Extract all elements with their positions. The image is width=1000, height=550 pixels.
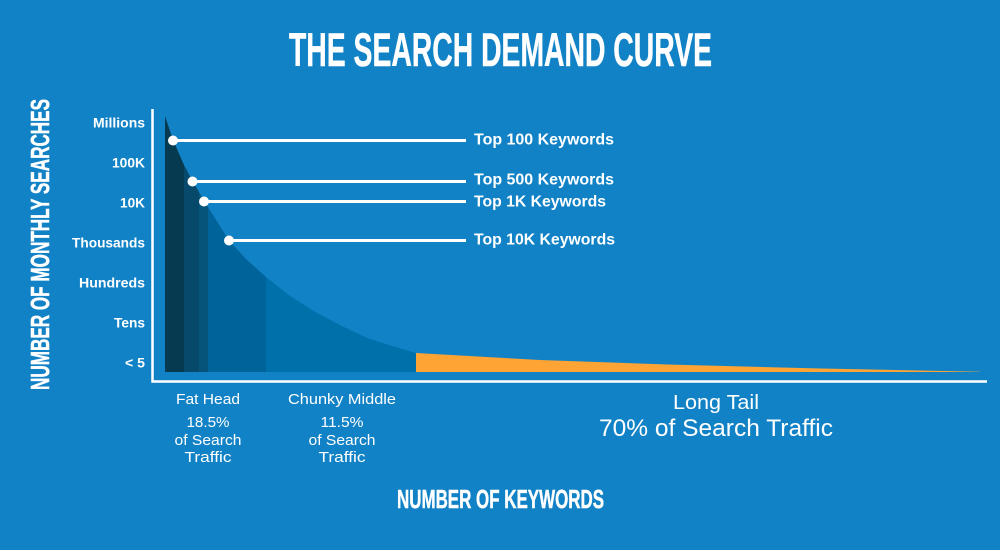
callout: top 100 keywords: Top 100 Keywords — [474, 132, 614, 148]
segment: top 100 keywords — [165, 116, 184, 372]
chart axes — [152, 109, 987, 382]
callout: top 10K keywords: Top 10K Keywords — [474, 232, 615, 248]
label: fat head: of Search — [174, 432, 242, 449]
label: chunky middle: of Search — [308, 432, 376, 449]
label: fat head: 18.5% — [186, 414, 230, 431]
label: long tail: Long Tail — [673, 392, 759, 414]
y axis labels: < 5 — [125, 356, 145, 370]
segment: top 500 keywords — [184, 165, 199, 372]
y axis labels: Hundreds — [79, 276, 145, 290]
segment: chunky middle — [266, 277, 416, 372]
y axis labels: Millions — [93, 116, 145, 130]
label: fat head: Traffic — [184, 449, 232, 466]
y axis labels: 10K — [120, 196, 145, 210]
label: chunky middle: Traffic — [318, 449, 366, 466]
segment: top 10K keywords — [208, 207, 266, 372]
label: fat head — [174, 391, 242, 466]
callout: top 10K keywords — [224, 232, 615, 248]
title: THE SEARCH DEMAND CURVE — [289, 23, 712, 76]
label: long tail: 70% of Search Traffic — [599, 415, 833, 442]
label: chunky middle: Chunky Middle — [288, 391, 396, 408]
y axis labels: Thousands — [72, 236, 145, 250]
segment: top 1K keywords — [199, 192, 208, 372]
demand curve area — [165, 116, 980, 372]
y axis labels: 100K — [112, 156, 145, 170]
x axis title: NUMBER OF KEYWORDS — [397, 484, 604, 514]
callout: top 500 keywords: Top 500 Keywords — [474, 172, 614, 188]
label: fat head: Fat Head — [176, 391, 240, 408]
y axis labels: Tens — [114, 316, 145, 330]
label: long tail — [599, 392, 833, 442]
label: chunky middle — [288, 391, 396, 466]
callout: top 500 keywords — [188, 172, 614, 188]
callout: top 1K keywords: Top 1K Keywords — [474, 194, 606, 210]
label: chunky middle: 11.5% — [320, 414, 364, 431]
y axis labels — [72, 116, 145, 370]
segment: long tail — [416, 353, 980, 372]
callout: top 1K keywords — [199, 194, 606, 210]
callout: top 100 keywords — [168, 132, 614, 148]
